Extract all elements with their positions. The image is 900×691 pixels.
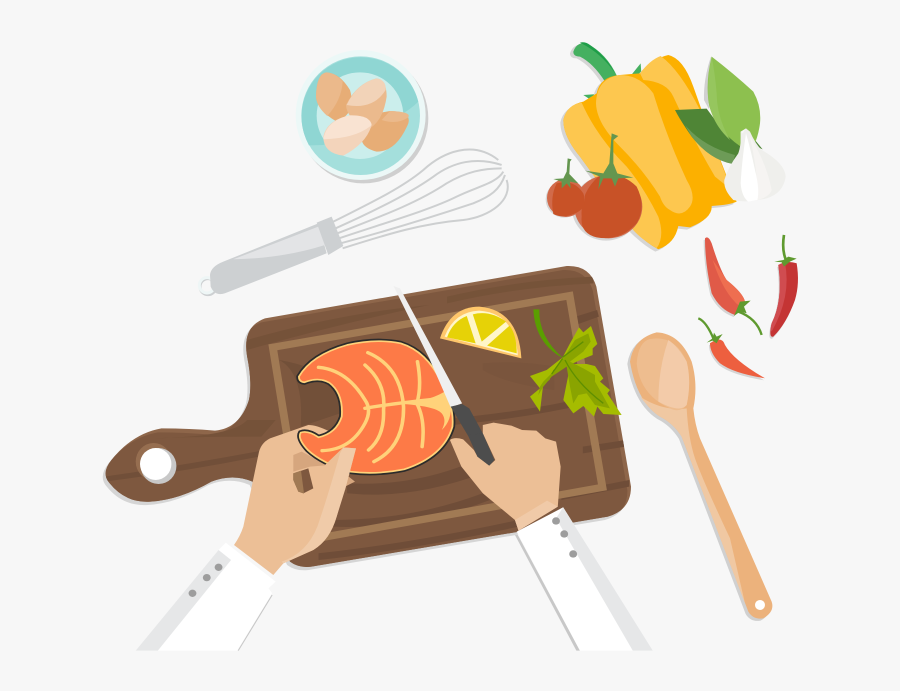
parsley inner shade (538, 333, 610, 408)
bowl (296, 50, 428, 183)
left hand thumb (282, 447, 356, 563)
chili: lower (698, 318, 765, 380)
cutting board group (102, 266, 631, 570)
spoon hole (755, 600, 765, 610)
large tomato (572, 133, 642, 241)
parsley stem (533, 309, 563, 358)
parsley leaf (530, 326, 622, 417)
pepper (560, 55, 737, 252)
spoon bowl inner (637, 338, 689, 410)
left sleeve (136, 543, 276, 651)
egg: back right (362, 111, 409, 152)
whisk handle (210, 217, 343, 294)
right hand (450, 423, 561, 531)
whisk wires (333, 150, 508, 248)
bowl of eggs and whisk group (199, 50, 508, 295)
cutting board (106, 266, 631, 567)
small tomato (546, 158, 585, 218)
board groove (273, 296, 602, 541)
right sleeve (515, 507, 653, 651)
egg: middle (346, 78, 387, 128)
left hand (234, 425, 355, 575)
gap between fingers (293, 468, 313, 493)
egg: back left (316, 72, 352, 122)
parsley veins (552, 342, 603, 403)
parsley (530, 309, 622, 417)
finger shade (293, 452, 355, 487)
spoon light edge (640, 397, 745, 603)
knife (394, 286, 494, 466)
handle hole (136, 443, 176, 484)
board shadow (103, 269, 628, 570)
wooden spoon (627, 332, 772, 621)
vegetables group (546, 42, 798, 380)
board items and right arm (136, 286, 653, 651)
leaves and garlic group (675, 57, 786, 202)
garlic (724, 128, 786, 202)
pepper stem (570, 42, 642, 103)
spoon body (630, 332, 772, 619)
illustration: cooking top view (102, 42, 798, 651)
chili: right (769, 235, 798, 339)
knife handle over hand (469, 433, 494, 466)
whisk ring (199, 278, 216, 295)
salmon steak (299, 341, 453, 473)
dark leaf (675, 109, 763, 164)
chili: upper left (704, 237, 762, 335)
spoon shadow (627, 335, 770, 621)
lemon wedge (440, 307, 521, 358)
spoon bowl highlight (658, 340, 689, 408)
egg: front (323, 115, 372, 156)
basil leaf (704, 57, 760, 147)
